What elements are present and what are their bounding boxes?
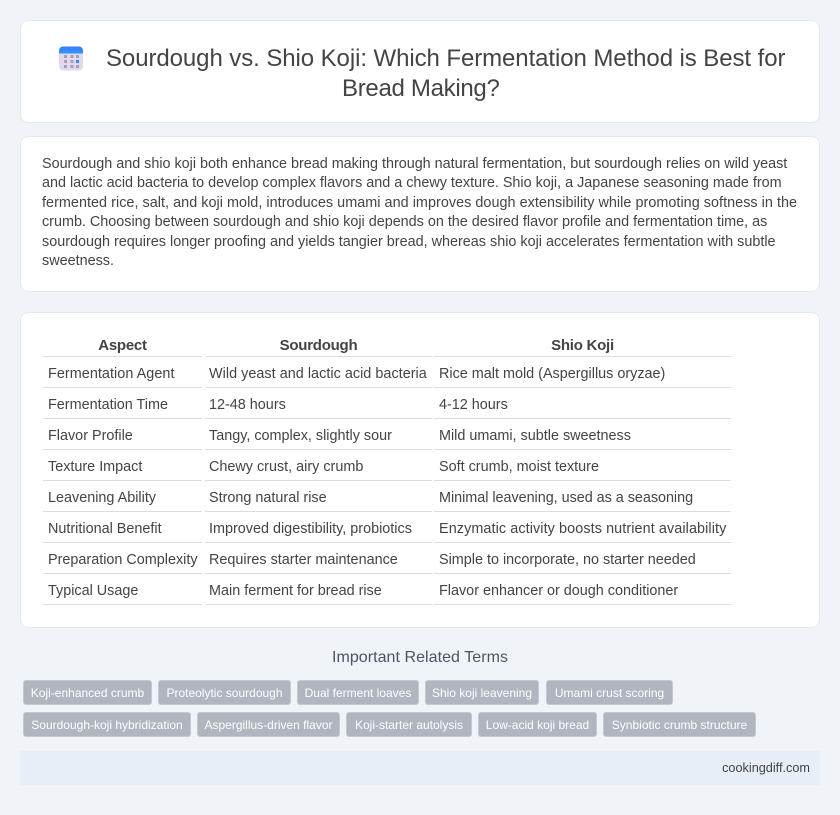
tag [23,680,152,705]
row: leavening ability: Minimal leavening, used as a seasoning [439,490,693,506]
tag [158,680,291,705]
row: texture impact: Texture Impact [48,459,142,475]
title: Bread Making? [342,75,500,102]
row: flavor profile: Tangy, complex, slightly sour [209,428,392,444]
row: preparation complexity: Preparation Complexity [48,552,198,568]
row: nutritional benefit: Enzymatic activity boosts nutrient availability [439,521,726,537]
intro text: fermented rice, salt, and koji mold, introduces umami and improves dough extensibility while promoting softness in the [42,195,797,211]
title: Sourdough vs. Shio Koji: Which Fermentation Method is Best for [106,45,785,72]
intro text: sourdough requires longer proofing and yields tangier bread, whereas shio koji accelerates fermentation with subtle [42,234,776,250]
row: preparation complexity: Simple to incorporate, no starter needed [439,552,696,568]
related terms heading: Important Related Terms [332,649,508,666]
header panel [20,20,820,123]
tag: Low-acid koji bread [486,718,589,732]
row: nutritional benefit: Nutritional Benefit [48,521,162,537]
row: fermentation time: 4-12 hours [439,397,508,413]
icon: calendar grid [59,46,83,70]
tag: Koji-starter autolysis [355,718,463,732]
tag [546,680,673,705]
row: texture impact: Chewy crust, airy crumb [209,459,363,475]
row: flavor profile: Mild umami, subtle sweetness [439,428,631,444]
table header [98,337,614,354]
tag [603,712,756,737]
tag [23,712,191,737]
row: typical usage [48,583,678,599]
tag [197,712,340,737]
row: fermentation agent: Fermentation Agent [48,366,174,382]
panel: introduction [20,136,820,292]
row: typical usage: Typical Usage [48,583,138,599]
intro text: sweetness. [42,253,114,269]
row: fermentation time [48,397,508,413]
row: leavening ability: Strong natural rise [209,490,327,506]
row: preparation complexity [48,552,696,568]
row: nutritional benefit: Improved digestibility, probiotics [209,521,412,537]
row: texture impact [48,459,599,475]
intro text: Sourdough and shio koji both enhance bread making through natural fermentation, but sourdough relies on wild yeast [42,156,787,172]
row: preparation complexity: Requires starter maintenance [209,552,398,568]
row: typical usage: Flavor enhancer or dough conditioner [439,583,678,599]
tag: Synbiotic crumb structure [612,718,747,732]
tag [425,680,539,705]
intro text: crumb. Choosing between sourdough and shio koji depends on the desired flavor profile and fermentation time, as [42,214,767,230]
row: texture impact: Soft crumb, moist texture [439,459,599,475]
row: nutritional benefit [48,521,726,537]
tag: Dual ferment loaves [305,686,411,700]
tag: Aspergillus-driven flavor [204,718,333,732]
tag: Sourdough-koji hybridization [31,718,183,732]
tag [297,680,419,705]
row: leavening ability: Leavening Ability [48,490,156,506]
row: fermentation time: Fermentation Time [48,397,168,413]
panel: comparison table [20,312,820,628]
row: fermentation agent: Wild yeast and lactic acid bacteria [209,366,427,382]
intro text: and lactic acid bacteria to develop complex flavors and a chewy texture. Shio koji, a Japanese seasoning made from [42,175,782,191]
row: flavor profile: Flavor Profile [48,428,133,444]
related terms tags [23,680,756,737]
table header: Aspect [98,337,147,354]
table header: Shio Koji [551,337,614,354]
footer bar [20,751,820,785]
tag [478,712,597,737]
row: fermentation time: 12-48 hours [209,397,286,413]
row: fermentation agent [48,366,665,382]
row: fermentation agent: Rice malt mold (Aspergillus oryzae) [439,366,665,382]
row: typical usage: Main ferment for bread rise [209,583,382,599]
footer credit: cookingdiff.com [722,761,810,775]
title [106,45,786,102]
table header: Sourdough [280,337,357,354]
tag: Shio koji leavening [432,686,532,700]
row: flavor profile [48,428,631,444]
tag: Umami crust scoring [555,686,664,700]
tag: Koji-enhanced crumb [31,686,144,700]
intro text [42,156,797,269]
tag [346,712,472,737]
row: leavening ability [48,490,693,506]
tag: Proteolytic sourdough [166,686,283,700]
